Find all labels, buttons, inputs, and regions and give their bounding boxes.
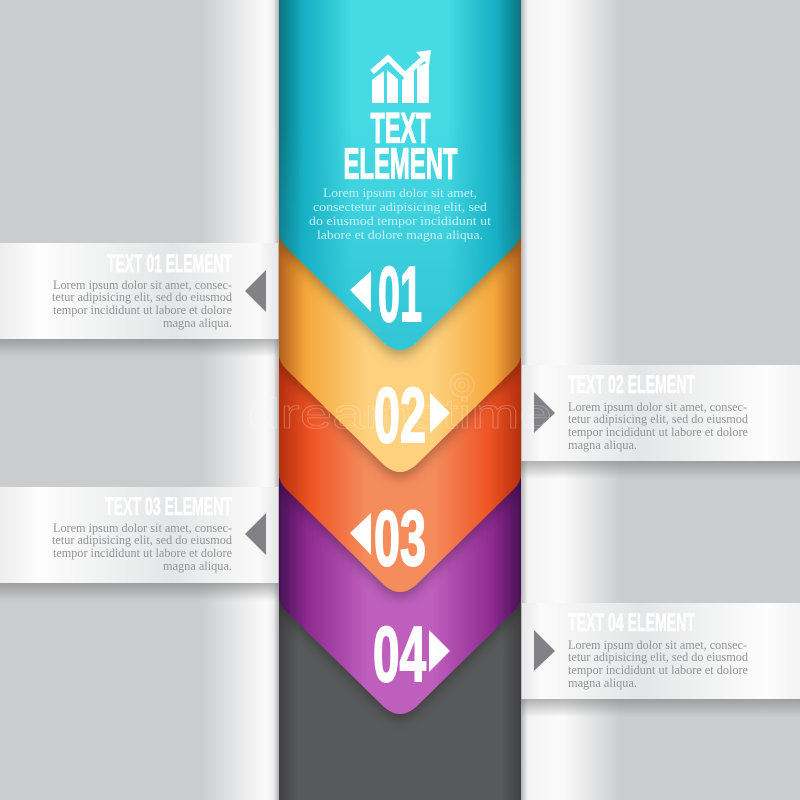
icon: ribbon 04 arrow (534, 630, 555, 671)
text block: intro paragraph: consectetur adipisicing elit, sed (313, 199, 488, 214)
chevron: purple (279, 475, 521, 721)
number 01 with arrow: 01 (378, 250, 422, 338)
title: ELEMENT (344, 140, 458, 188)
number 03 with arrow (350, 494, 426, 582)
text block: ribbon 04 body: magna aliqua. (568, 676, 637, 690)
panel: dark base (279, 596, 521, 800)
number 04 with arrow: 04 (373, 610, 426, 698)
icon: ribbon 03 arrow (245, 513, 266, 555)
chevron: red (279, 354, 521, 602)
text block: ribbon 03 body: magna aliqua. (163, 559, 232, 573)
panel: ribbon 02 (521, 365, 800, 479)
heading: text 02 element: TEXT 02 ELEMENT (568, 371, 695, 399)
title (344, 104, 458, 188)
text block: intro paragraph (309, 185, 491, 242)
watermark: dreamstime (248, 390, 552, 437)
text block: ribbon 02 body: Lorem ipsum dolor sit amet, consec- (568, 400, 747, 414)
heading: text 01 element: TEXT 01 ELEMENT (107, 250, 232, 278)
text block: ribbon 02 body: tetur adipisicing elit, sed do eiusmod (568, 412, 749, 426)
text block: ribbon 04 body (568, 638, 749, 690)
text block: intro paragraph: do eiusmod tempor incididunt ut (309, 213, 491, 228)
text block: intro paragraph: labore et dolore magna aliqua. (317, 227, 483, 242)
heading: text 04 element: TEXT 04 ELEMENT (568, 609, 695, 637)
number 02 with arrow: 02 (374, 371, 426, 459)
icon: ribbon 02 arrow (534, 392, 555, 433)
text block: ribbon 02 body (568, 400, 749, 452)
text block: intro paragraph: Lorem ipsum dolor sit amet, (323, 185, 477, 200)
text block: ribbon 03 body: tetur adipisicing elit, sed do eiusmod (52, 533, 233, 547)
title: TEXT (370, 104, 430, 152)
text block: ribbon 04 body: Lorem ipsum dolor sit amet, consec- (568, 638, 747, 652)
panel: central column (279, 0, 521, 800)
panel: ribbon 03 (0, 487, 279, 601)
text block: ribbon 01 body: tetur adipisicing elit, sed do eiusmod (52, 290, 233, 304)
text block: ribbon 01 body: tempor incididunt ut labore et dolore (53, 303, 232, 317)
chevron: orange (279, 233, 521, 484)
text block: ribbon 03 body: tempor incididunt ut labore et dolore (53, 546, 232, 560)
icon: rising bar chart (372, 50, 431, 103)
chevron: blue (279, 0, 521, 350)
number 01 with arrow (350, 250, 422, 338)
chevron: blue lower tint (279, 172, 521, 350)
text block: ribbon 04 body: tempor incididunt ut labore et dolore (568, 663, 748, 677)
text block: ribbon 01 body (52, 278, 233, 330)
text block: ribbon 01 body: magna aliqua. (163, 316, 232, 330)
heading: text 03 element: TEXT 03 ELEMENT (105, 493, 232, 521)
watermark (248, 373, 552, 437)
text block: ribbon 03 body: Lorem ipsum dolor sit amet, consec- (53, 521, 232, 535)
text block: ribbon 03 body (52, 521, 233, 573)
number 03 with arrow: 03 (374, 494, 426, 582)
text block: ribbon 01 body: Lorem ipsum dolor sit amet, consec- (53, 278, 232, 292)
icon: ribbon 01 arrow (245, 270, 266, 312)
panel: ribbon 01 (0, 243, 279, 357)
panel: ribbon 04 (521, 603, 800, 717)
text block: ribbon 04 body: tetur adipisicing elit, sed do eiusmod (568, 650, 749, 664)
text block: ribbon 02 body: magna aliqua. (568, 438, 637, 452)
text block: ribbon 02 body: tempor incididunt ut labore et dolore (568, 425, 748, 439)
